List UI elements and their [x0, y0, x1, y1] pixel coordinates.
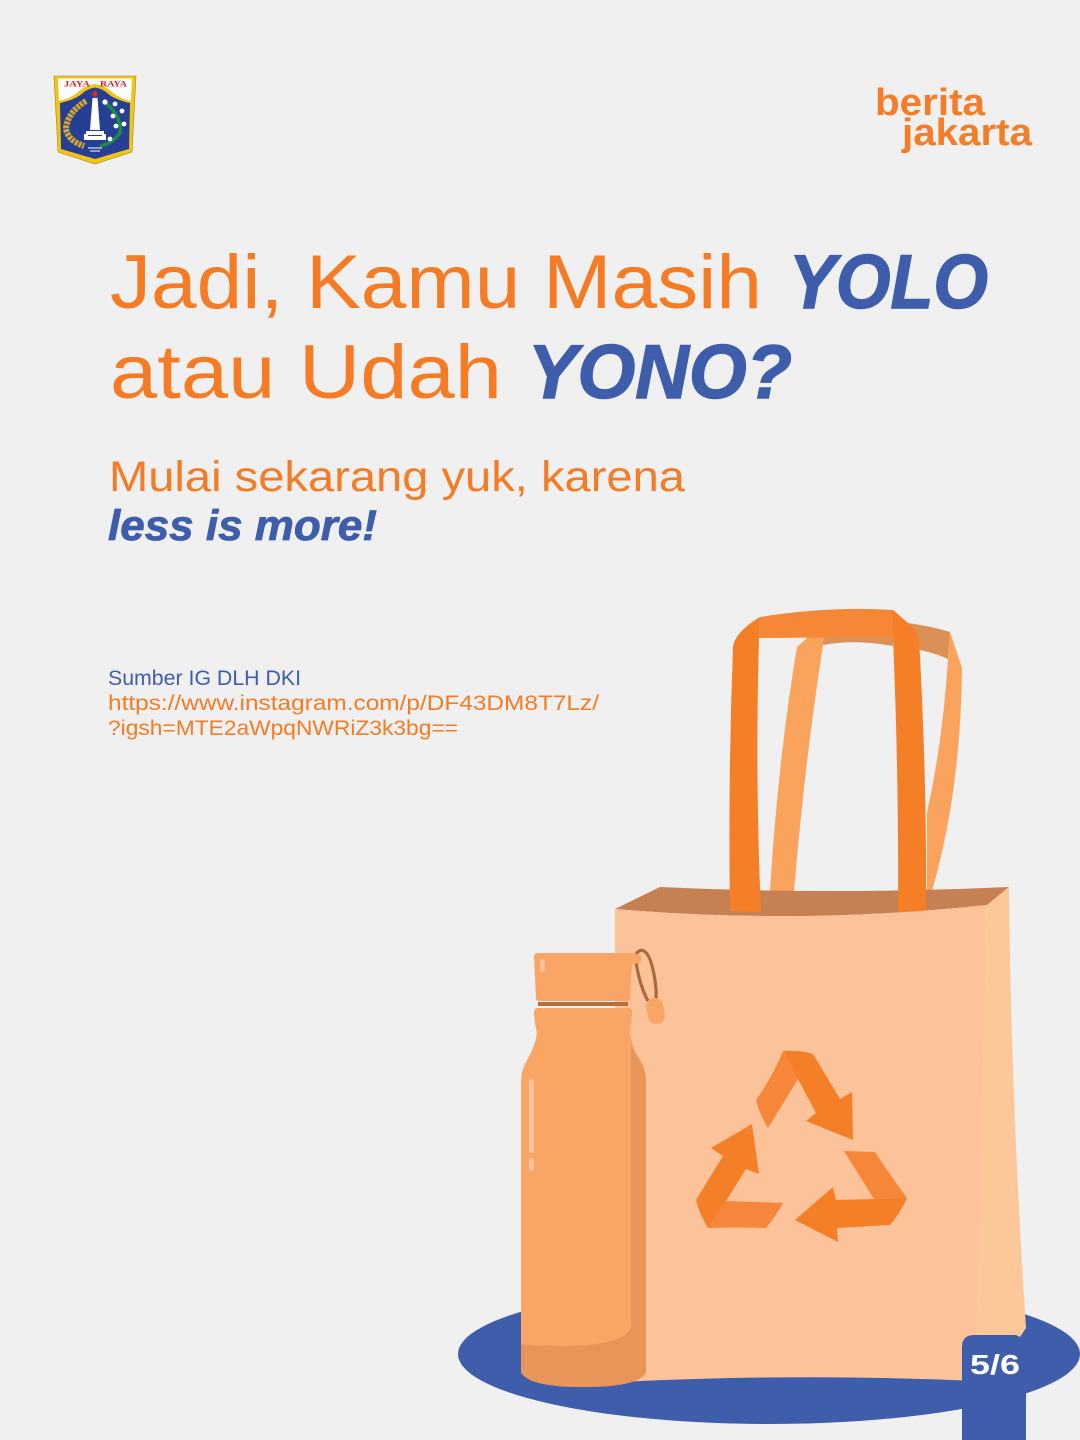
logo: Jakarta coat of arms: JAYA: [64, 80, 90, 88]
bag front panel: [615, 905, 987, 1382]
blue ground ellipse: [458, 1284, 1080, 1424]
subtitle: [108, 453, 685, 550]
subtitle: Mulai sekarang yuk, karena: [109, 453, 685, 501]
logo: berita jakarta: berita: [875, 82, 986, 124]
recycling symbol: [696, 1051, 907, 1242]
title: [110, 240, 988, 415]
source text: Sumber IG DLH DKI: [108, 667, 301, 690]
source text: ?igsh=MTE2aWpqNWRiZ3k3bg==: [108, 717, 458, 740]
bottle strap loop and tag: [636, 950, 666, 1025]
title: YONO?: [528, 330, 792, 415]
logo: Jakarta coat of arms: RAYA: [100, 80, 127, 88]
logo: berita jakarta: jakarta: [901, 112, 1033, 154]
bottle body: [521, 1008, 646, 1387]
illustration: water bottle: [521, 950, 666, 1387]
subtitle: less is more!: [108, 502, 377, 550]
source text: [108, 667, 599, 740]
bottle shaded side: [521, 1044, 646, 1387]
page number tab: 5/6: [970, 1349, 1020, 1380]
bottle neck band: [538, 1002, 628, 1006]
logo: Jakarta coat of arms: [54, 76, 136, 164]
bag handles, back: [770, 623, 962, 891]
illustration: tote bag: [615, 609, 1026, 1382]
page number tab: [962, 1335, 1026, 1440]
logo: berita jakarta: [875, 82, 1033, 154]
bag handles, front: [729, 609, 926, 913]
bottle cap: [534, 953, 642, 1001]
title: atau Udah: [110, 330, 502, 415]
source text: https://www.instagram.com/p/DF43DM8T7Lz/: [108, 692, 599, 715]
title: YOLO: [789, 240, 988, 325]
bag interior: [615, 887, 1009, 916]
title: Jadi, Kamu Masih: [110, 240, 762, 325]
bottle highlights: [529, 959, 545, 1171]
bag side panel: [976, 887, 1026, 1340]
